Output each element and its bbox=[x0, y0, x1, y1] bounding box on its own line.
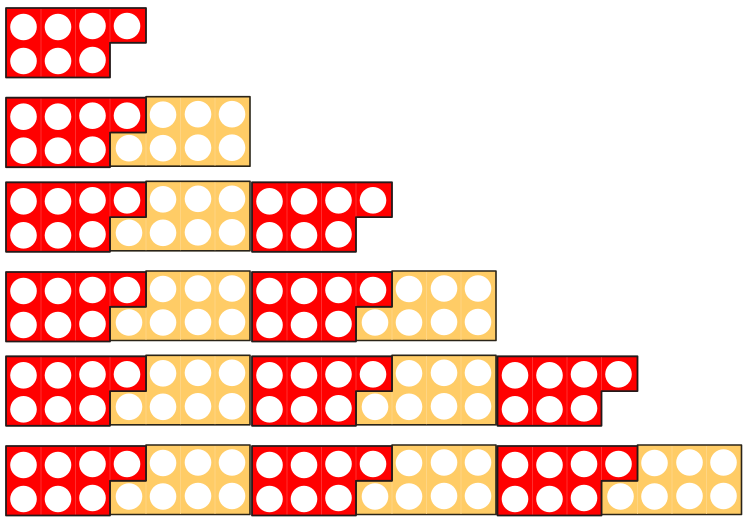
row 5: two pairs and a red rod bbox=[6, 355, 638, 426]
row 4: two red and yellow pairs bbox=[6, 271, 496, 342]
row 2: red and yellow rods bbox=[6, 97, 250, 167]
row 6: three red and yellow pairs bbox=[6, 445, 742, 516]
row 1: one red rod bbox=[6, 8, 146, 78]
row 3: red, yellow and red rods bbox=[6, 181, 392, 252]
